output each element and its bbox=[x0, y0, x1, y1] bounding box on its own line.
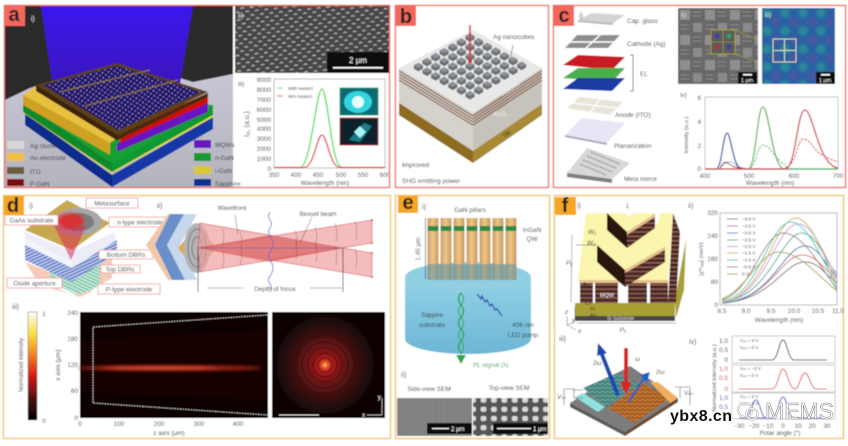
RGB spectra chart: Intensity (a.u.) bbox=[684, 117, 690, 153]
metasurface colour map iii bbox=[761, 7, 836, 85]
legend: layers: Au electrode bbox=[30, 155, 66, 162]
callout labels: Metasurface bbox=[94, 200, 130, 208]
panel c: RGB OLED with meta mirror bbox=[553, 0, 846, 188]
emission spectrum chart: EL bbox=[246, 129, 251, 135]
angular emission charts: 30 bbox=[823, 423, 831, 430]
angular emission charts: −10 bbox=[763, 423, 774, 430]
panel label a bbox=[4, 4, 25, 26]
angular emission charts: −30 bbox=[734, 423, 745, 430]
side-view SEM bbox=[397, 398, 472, 436]
emission spectrum chart: 8000 bbox=[257, 87, 271, 94]
VCSEL structure bbox=[25, 200, 117, 297]
pillar labels: InGaN bbox=[523, 227, 542, 234]
longitudinal intensity map: 400 bbox=[233, 421, 244, 428]
watermark bbox=[670, 398, 834, 425]
device labels: Vₜₙ bbox=[557, 394, 566, 401]
callout labels: n-type electrode bbox=[117, 220, 163, 226]
caption bbox=[402, 162, 461, 185]
RGB spectra chart: 700 bbox=[833, 173, 844, 180]
emission spectrum chart: 0 bbox=[267, 166, 271, 173]
cube illustration: Al₂O₃ bbox=[493, 112, 508, 118]
unit-cell labels: Au bbox=[590, 313, 597, 319]
pillar labels: ii) bbox=[401, 372, 406, 379]
emission spectrum chart: 4000 bbox=[257, 126, 271, 133]
layer labels: Cap. glass bbox=[627, 18, 658, 25]
longitudinal intensity map: 0 bbox=[78, 421, 82, 428]
THG voltage-tuning chart: 80 bbox=[711, 279, 718, 286]
panel f: chevron metasurface THz bbox=[554, 195, 844, 438]
pillar labels: GaN pillars bbox=[454, 207, 486, 214]
pillar labels: Sappire bbox=[421, 312, 443, 319]
layer labels: Planarization bbox=[614, 143, 652, 150]
angular emission charts: Normalized intensity (a.u.) bbox=[712, 344, 718, 412]
longitudinal intensity map: 200 bbox=[154, 421, 165, 428]
angular emission charts: V₂ₙ = 0 V bbox=[740, 345, 758, 350]
SEM image: ii) bbox=[238, 13, 243, 20]
panel label b: b bbox=[400, 6, 412, 28]
unit-cell labels: Pᵧ bbox=[566, 260, 573, 267]
unit-cell labels: x bbox=[577, 328, 582, 335]
angular emission charts: V₁ₙ = 3 V bbox=[740, 394, 758, 399]
panel label e bbox=[398, 192, 418, 214]
emission spectrum chart: 6000 bbox=[257, 107, 271, 114]
beam labels bbox=[12, 203, 336, 311]
beam labels: Wavefront bbox=[218, 205, 247, 212]
THG voltage-tuning chart: 10.5 bbox=[812, 308, 825, 315]
callout labels: Bottom DBRs bbox=[107, 252, 145, 259]
layer labels: EL bbox=[640, 71, 648, 78]
THG voltage-tuning chart: 10.0 bbox=[788, 308, 801, 315]
metasurface colour map iii: iii) bbox=[765, 12, 771, 19]
pillar labels: 1.45 μm bbox=[415, 237, 422, 261]
emission spectrum chart: 500 bbox=[336, 172, 347, 179]
emission spectrum chart: With metaVI bbox=[288, 86, 313, 91]
THG voltage-tuning chart: 160 bbox=[707, 256, 718, 263]
angular emission charts: Polar angle (°) bbox=[760, 429, 800, 437]
Bessel beam diagram bbox=[146, 212, 373, 292]
unit-cell labels: W₂ bbox=[587, 240, 596, 247]
angular emission charts: 0 bbox=[781, 423, 785, 430]
beam labels: Depth of focus bbox=[254, 286, 296, 293]
RGB spectra chart: 4 bbox=[697, 119, 701, 126]
panel a: GaN LED with metasurface: i) bbox=[31, 16, 35, 23]
unit-cell labels: i) bbox=[577, 203, 581, 210]
angular emission charts: 0 bbox=[724, 386, 728, 393]
angular emission charts: 1.0 bbox=[719, 338, 728, 345]
emission spectrum chart: 400 bbox=[291, 172, 302, 179]
legend: layers: MQWs bbox=[215, 142, 235, 149]
watermark: MEMS bbox=[765, 398, 834, 424]
panel label f: f bbox=[562, 195, 569, 217]
THG voltage-tuning chart: 9.0 bbox=[742, 308, 751, 315]
longitudinal intensity map: z axis (μm) bbox=[153, 430, 185, 437]
THG voltage-tuning chart: ii) bbox=[688, 203, 693, 210]
THG voltage-tuning chart: 240 bbox=[707, 233, 718, 240]
beam labels: Bessel beam bbox=[300, 211, 336, 218]
callout labels: GaAs substrate bbox=[9, 218, 54, 224]
RGB spectra chart bbox=[680, 92, 844, 187]
angular emission charts: −20 bbox=[749, 423, 760, 430]
SEM image: 2 μm bbox=[349, 56, 367, 65]
panel label b bbox=[395, 5, 416, 28]
unit-cell labels: L bbox=[626, 203, 630, 210]
unit-cell labels: z bbox=[564, 309, 569, 316]
legend: layers: P-GaN bbox=[30, 181, 50, 188]
RGB spectra chart: 400 bbox=[700, 173, 711, 180]
layer labels: Meta mirror bbox=[624, 176, 658, 183]
emission spectrum chart: 5000 bbox=[257, 117, 271, 124]
pillar labels: 406-nm bbox=[512, 322, 534, 329]
voltage legend: −3.0 V bbox=[742, 230, 756, 236]
colour bar: 0 bbox=[42, 418, 46, 425]
THG voltage-tuning chart: |χ⁽²⁾ₓₓₓ| (nm/V) bbox=[698, 242, 705, 276]
SEM image ii: 1 μm bbox=[741, 78, 754, 84]
angular emission charts bbox=[689, 336, 835, 437]
SEM image bbox=[235, 6, 389, 73]
RGB spectra chart: 2 bbox=[697, 143, 701, 150]
longitudinal intensity map: 0 bbox=[74, 415, 78, 422]
angular emission charts: 0.5 bbox=[719, 347, 728, 354]
unit-cell labels: Pt bbox=[590, 307, 596, 313]
panel label c: c bbox=[558, 5, 570, 27]
emission spectrum chart: I bbox=[244, 135, 251, 137]
unit-cell labels bbox=[564, 203, 634, 335]
SEM image ii bbox=[678, 8, 758, 84]
emission spectrum chart: iii) bbox=[238, 81, 244, 88]
emission spectrum chart: 3000 bbox=[257, 136, 271, 143]
THG voltage-tuning chart: 320 bbox=[707, 210, 718, 217]
RGB spectra chart: Wavelength (nm) bbox=[746, 180, 794, 187]
device render background bbox=[5, 6, 233, 187]
transverse ring pattern bbox=[272, 312, 385, 419]
THG voltage-tuning chart: 0 bbox=[714, 302, 718, 309]
exploded layer stack bbox=[563, 13, 633, 183]
longitudinal intensity map: 300 bbox=[194, 421, 205, 428]
voltage legend: −4.0 V bbox=[742, 216, 756, 222]
device labels: Vₜₙ bbox=[684, 390, 693, 397]
longitudinal intensity map: 60 bbox=[71, 388, 78, 395]
voltage legend: −3.5 V bbox=[742, 224, 756, 228]
pillar labels: i) bbox=[422, 204, 426, 211]
transverse ring pattern: x bbox=[362, 412, 366, 419]
THG voltage-tuning chart: 9.5 bbox=[767, 308, 776, 315]
legend: layers: Ag cluster bbox=[30, 143, 59, 150]
watermark: ybx8.cn bbox=[670, 408, 732, 425]
emission spectrum chart bbox=[238, 77, 391, 187]
panel label f bbox=[555, 195, 576, 217]
angular emission charts: V₂ₙ = 3 V bbox=[740, 401, 758, 406]
angular emission charts: 10 bbox=[794, 423, 802, 430]
unit-cell labels: Cr bbox=[585, 301, 591, 307]
pillar labels bbox=[401, 204, 542, 393]
legend: layers: n-GaN bbox=[215, 155, 234, 162]
device labels: iii) bbox=[559, 336, 566, 343]
THG voltage-tuning chart: Wavelength (nm) bbox=[755, 317, 803, 324]
panel b: SHG nanocube structure bbox=[395, 5, 548, 188]
transverse ring pattern: y bbox=[378, 394, 382, 401]
unit-cell labels: W₁ bbox=[588, 229, 596, 236]
longitudinal intensity map bbox=[55, 310, 268, 437]
RGB spectra chart: 6 bbox=[697, 95, 701, 102]
longitudinal intensity map: 100 bbox=[114, 421, 125, 428]
angular emission charts: iv) bbox=[689, 339, 696, 346]
beam labels: ii) bbox=[157, 203, 162, 210]
3D chevron unit cell bbox=[571, 213, 686, 323]
metasurface colour map iii: 1 μm bbox=[819, 78, 832, 84]
side-view SEM: 2 μm bbox=[451, 427, 464, 433]
device labels: 2ω bbox=[592, 360, 602, 367]
photo insets bbox=[340, 88, 378, 145]
voltage legend bbox=[727, 216, 756, 276]
THG voltage-tuning chart bbox=[688, 203, 844, 324]
beam labels: i) bbox=[29, 203, 33, 210]
emission spectrum chart: 9000 bbox=[257, 77, 271, 84]
legend: layers: i-GaN bbox=[215, 168, 232, 175]
voltage legend: −1.5 V bbox=[742, 250, 756, 256]
RGB spectra chart: 0 bbox=[697, 166, 701, 173]
sapphire disc and pillars bbox=[405, 218, 531, 364]
callout labels: Oxide aperture bbox=[13, 280, 56, 288]
colour bar bbox=[19, 311, 46, 425]
angular emission charts: V₁ₙ = 0 V bbox=[740, 338, 758, 343]
device labels: 2ω bbox=[655, 369, 665, 376]
LED layer stack illustration bbox=[23, 63, 213, 187]
voltage legend: 0 V bbox=[742, 272, 750, 276]
layer labels bbox=[579, 13, 666, 183]
callout labels bbox=[5, 198, 172, 294]
longitudinal intensity map: x axis (μm) bbox=[55, 349, 62, 381]
voltage legend: −2.0 V bbox=[742, 244, 756, 249]
colour bar: Normalized intensity bbox=[19, 338, 25, 392]
emission spectrum chart: W/o metaVI bbox=[288, 94, 312, 99]
top-view SEM bbox=[473, 398, 548, 436]
panel a: GaN LED with metasurface bbox=[4, 4, 391, 188]
callout labels: P-type electrode bbox=[106, 286, 153, 294]
panel label d bbox=[4, 195, 24, 217]
RGB spectra chart: 600 bbox=[789, 173, 800, 180]
panel e: GaN nanopillars bbox=[396, 192, 550, 438]
panel label c bbox=[553, 5, 574, 27]
emission spectrum chart: Wavelength (nm) bbox=[301, 180, 349, 187]
layer labels: Anode (ITO) bbox=[615, 112, 651, 119]
cube illustration bbox=[399, 25, 542, 163]
emission spectrum chart: 450 bbox=[313, 172, 324, 179]
top-view SEM: 1 μm bbox=[533, 427, 546, 433]
pillar labels: substrate bbox=[419, 322, 446, 329]
angular emission charts: V₂ₙ = 0 V bbox=[740, 373, 758, 378]
angular emission charts: 0.5 bbox=[719, 404, 728, 411]
pillar labels: Side-view SEM bbox=[407, 386, 451, 393]
angular emission charts: 0.5 bbox=[719, 375, 728, 382]
caption: SHG emitting power bbox=[402, 178, 461, 185]
longitudinal intensity map: 240 bbox=[67, 310, 78, 317]
pillar labels: Top-view SEM bbox=[489, 385, 529, 392]
cube illustration: TiN bbox=[502, 130, 512, 140]
layer labels: Cathode (Ag) bbox=[627, 41, 666, 48]
angular emission charts: 1.0 bbox=[719, 366, 728, 373]
emission spectrum chart: 2000 bbox=[257, 146, 271, 153]
emission spectrum chart: 600 bbox=[380, 172, 391, 179]
unit-cell labels: MQW bbox=[600, 293, 615, 299]
angular emission charts: V₁ₙ = −3 V bbox=[740, 366, 761, 371]
legend: layers: Sapphire bbox=[215, 181, 241, 188]
beam labels: iii) bbox=[12, 304, 19, 311]
emission spectrum chart: 7000 bbox=[257, 97, 271, 104]
unit-cell labels: Pₓ bbox=[620, 327, 627, 334]
panel d: VCSEL Bessel beam metasurface bbox=[4, 195, 390, 438]
THG voltage-tuning chart: 8.5 bbox=[718, 308, 727, 315]
panel label d: d bbox=[7, 195, 19, 217]
pillar labels: QW bbox=[526, 236, 538, 243]
THG voltage-tuning chart: 11.0 bbox=[832, 308, 844, 315]
panel label a: a bbox=[8, 4, 20, 26]
longitudinal intensity map: 180 bbox=[67, 336, 78, 343]
device with beams bbox=[564, 343, 690, 436]
cube illustration: AlGOSS bbox=[501, 81, 522, 98]
colour bar: 1 bbox=[42, 311, 46, 318]
pillar labels: PL signal (λ) bbox=[473, 362, 508, 369]
device labels: ω bbox=[635, 356, 640, 363]
caption: Improved bbox=[402, 162, 429, 169]
RGB spectra chart: 500 bbox=[744, 173, 755, 180]
panel label e: e bbox=[402, 192, 414, 214]
angular emission charts: 1.0 bbox=[719, 395, 728, 402]
device labels bbox=[557, 336, 693, 401]
unit-cell labels: Si Substrate bbox=[607, 316, 634, 322]
voltage legend: −0.5 V bbox=[742, 264, 756, 270]
angular emission charts: 0 bbox=[724, 357, 728, 364]
SEM image ii: ii) bbox=[681, 12, 686, 19]
emission spectrum chart: 350 bbox=[269, 172, 280, 179]
legend: layers: ITO bbox=[30, 169, 41, 176]
angular emission charts: 20 bbox=[808, 423, 816, 430]
emission spectrum chart: 550 bbox=[358, 172, 369, 179]
longitudinal intensity map: 120 bbox=[67, 362, 78, 369]
unit-cell labels: y bbox=[571, 317, 576, 324]
layer labels: i) bbox=[579, 13, 583, 20]
legend: layers bbox=[7, 140, 241, 188]
voltage legend: −2.5 V bbox=[742, 238, 756, 242]
emission spectrum chart: 1000 bbox=[257, 156, 271, 163]
emission spectrum chart: (a.u.) bbox=[244, 111, 251, 129]
unit-cell labels: Au bbox=[583, 282, 590, 288]
pillar labels: LED pump bbox=[508, 332, 539, 339]
callout labels: Top DBRs bbox=[106, 266, 134, 274]
nanocube label: Ag nanocubes bbox=[493, 34, 535, 41]
voltage legend: −1.0 V bbox=[742, 258, 756, 262]
RGB spectra chart: iv) bbox=[680, 92, 687, 99]
